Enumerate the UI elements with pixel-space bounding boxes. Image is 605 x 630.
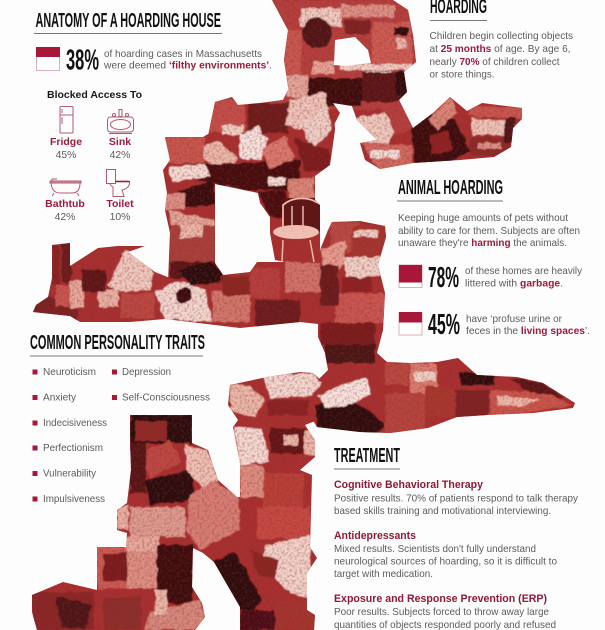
stat: 78%: 78% xyxy=(428,262,459,294)
chair xyxy=(273,198,322,262)
stat: 45%: 45% xyxy=(428,309,460,341)
stat description: urine: have ‘profuse urine or xyxy=(466,314,563,325)
treatment: antidepressants: target with medication. xyxy=(334,569,433,580)
treatment: exposure and response prevention xyxy=(334,593,556,630)
stat icon: 45 percent square xyxy=(399,312,422,335)
stat description: of hoarding cases in Massachusetts xyxy=(104,49,262,60)
stat description: urine xyxy=(466,314,590,337)
body text: children xyxy=(430,31,573,80)
panel: anatomy of a hoarding house xyxy=(34,10,272,223)
list: traits column one: Anxiety xyxy=(43,392,77,404)
panel: common personality traits xyxy=(30,332,210,505)
horizontal pile xyxy=(315,363,572,435)
lower right stack xyxy=(213,373,323,630)
treatment: antidepressants: Mixed results. Scientists don't fully understand xyxy=(334,544,536,555)
icon: bathtub xyxy=(50,179,81,196)
treatment: cognitive behavioral therapy: Positive results. 70% of patients respond to talk therapy xyxy=(334,494,579,504)
label: bathtub xyxy=(45,198,85,223)
treatment: exposure and response prevention: Exposure and Response Prevention (ERP) xyxy=(334,593,547,605)
treatment: antidepressants xyxy=(334,530,557,580)
list: traits column one xyxy=(32,367,107,505)
icon: toilet xyxy=(106,170,130,196)
label: sink: Sink xyxy=(109,136,131,148)
label: fridge: 45% xyxy=(56,150,76,161)
treatment: antidepressants: Antidepressants xyxy=(334,530,416,542)
stat icon: 78 percent square xyxy=(399,265,422,288)
stat description xyxy=(103,49,272,72)
list: traits column one: Indecisiveness xyxy=(43,418,107,429)
heading: anatomy: ANATOMY OF A HOARDING HOUSE xyxy=(36,10,221,32)
label: fridge: Fridge xyxy=(50,136,82,148)
body text: animal hoarding: Keeping huge amounts of pets without xyxy=(398,213,568,224)
treatment: cognitive behavioral therapy xyxy=(334,479,579,517)
stat description: garbage: of these homes are heavily xyxy=(465,266,583,277)
label: sink: 42% xyxy=(110,150,130,161)
stat description: garbage: littered with garbage. xyxy=(465,278,563,290)
body text: children: at 25 months of age. By age 6, xyxy=(430,44,570,55)
roof pile xyxy=(166,92,332,218)
white opening in the top pile xyxy=(334,37,371,66)
label: bathtub: 42% xyxy=(55,212,75,223)
stat description: garbage xyxy=(465,266,583,290)
list: traits column one: Vulnerability xyxy=(43,468,97,480)
label: toilet: Toilet xyxy=(106,198,134,210)
left column of boxes xyxy=(165,164,216,278)
stat description: were deemed ‘filthy environments’. xyxy=(103,60,272,72)
subheading: blocked access: Blocked Access To xyxy=(47,90,142,101)
list: traits column two: Self-Consciousness xyxy=(122,392,210,404)
body text: animal hoarding: unaware they're harming the animals. xyxy=(398,238,567,249)
stat: 38%: 38% xyxy=(66,44,99,76)
body text: children: Children begin collecting objects xyxy=(430,31,573,42)
treatment: exposure and response prevention: Poor results. Subjects forced to throw away large xyxy=(334,607,549,618)
list: traits column two: Depression xyxy=(122,367,171,378)
list: traits column one: Neuroticism xyxy=(43,367,96,378)
label: toilet xyxy=(106,198,134,223)
label: fridge xyxy=(50,136,82,161)
body text: children: nearly 70% of children collect xyxy=(430,57,560,68)
list: traits column one: Perfectionism xyxy=(43,443,103,454)
label: bathtub: Bathtub xyxy=(45,198,85,210)
body text: animal hoarding: ability to care for them. Subjects are often xyxy=(398,226,580,237)
stat description: urine: feces in the living spaces’. xyxy=(466,326,590,337)
heading: traits: COMMON PERSONALITY TRAITS xyxy=(30,332,205,354)
label: toilet: 10% xyxy=(110,212,130,223)
icon: sink xyxy=(108,110,134,134)
panel: hoarding in children xyxy=(430,0,573,80)
label: sink xyxy=(109,136,131,161)
left floor pile xyxy=(33,243,300,326)
heading: animal hoarding: ANIMAL HOARDING xyxy=(398,177,503,199)
icon: fridge xyxy=(60,106,73,133)
panel: animal hoarding xyxy=(397,177,590,341)
list: traits column one: Impulsiveness xyxy=(43,494,105,505)
treatment: antidepressants: neurological sources of hoarding, so it is difficult to xyxy=(334,556,557,568)
body text: animal hoarding xyxy=(398,213,580,249)
lower left stack xyxy=(32,415,240,630)
heading: treatment: TREATMENT xyxy=(334,445,400,467)
list: traits column two xyxy=(112,367,210,404)
top pile of boxes xyxy=(270,0,420,110)
panel: treatment xyxy=(334,445,579,630)
body text: children: or store things. xyxy=(430,70,494,80)
centre stack of crates xyxy=(285,222,386,363)
stat icon: 38 percent square xyxy=(36,47,60,70)
treatment: cognitive behavioral therapy: based skills training and motivational interviewing. xyxy=(334,506,551,517)
hoard arm reaching right xyxy=(357,97,522,170)
treatment: cognitive behavioral therapy: Cognitive Behavioral Therapy xyxy=(334,479,483,491)
